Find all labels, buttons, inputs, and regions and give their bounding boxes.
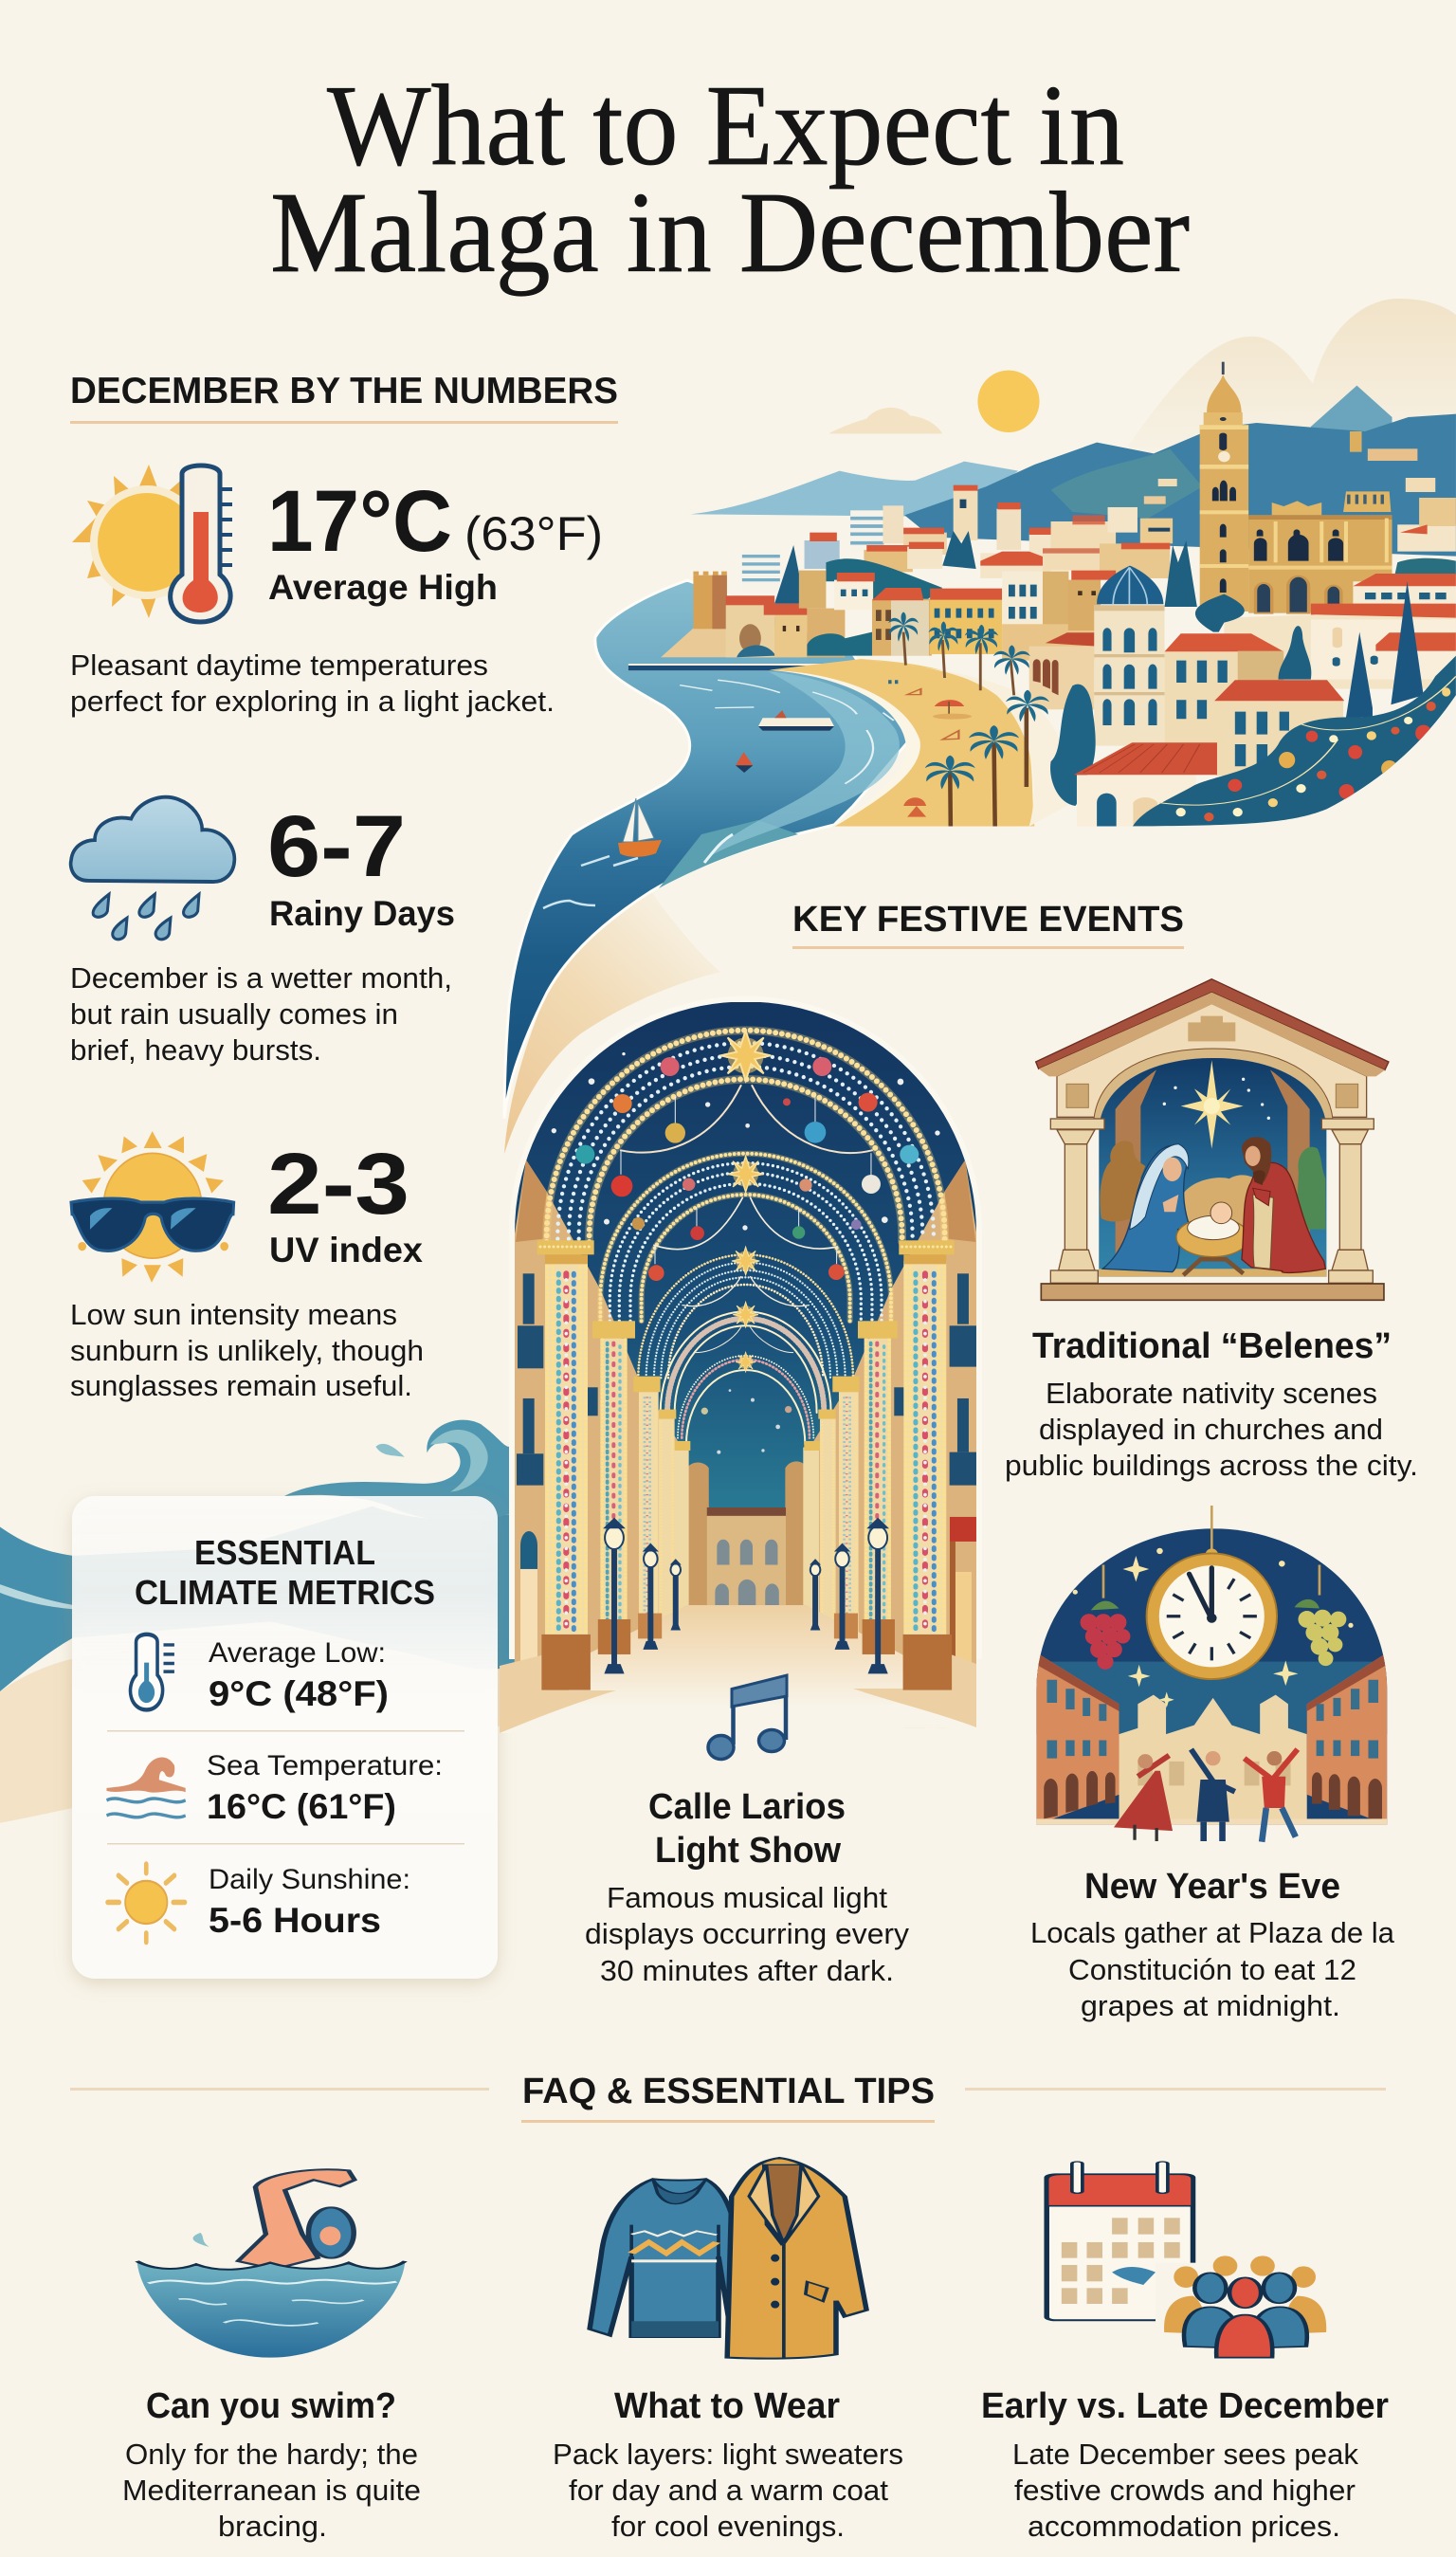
text: New Year's Eve [1030, 1867, 1395, 2022]
tip: what to wear: Pack layers: light sweaters [553, 2438, 903, 2471]
illustration: Malaga city skyline [628, 362, 1456, 836]
far arches [638, 1254, 853, 1444]
background clouds top right [1128, 299, 1456, 474]
stat: UV index: sunglasses remain useful. [70, 1369, 412, 1402]
pillar bases and lamps [541, 1518, 952, 1690]
icon: rain cloud [71, 797, 234, 940]
panel heading: ESSENTIAL [194, 1533, 375, 1572]
tip: what to wear: for day and a warm coat [569, 2474, 888, 2507]
modern blocks and hillside town [742, 485, 1173, 593]
tip: can you swim: Mediterranean is quite [122, 2474, 421, 2507]
metric: sea temperature [207, 1750, 443, 1826]
text: Calle Larios Light Show: 30 minutes after dark. [600, 1954, 894, 1987]
illustration: nativity scene [1036, 979, 1389, 1300]
sailboat [618, 798, 662, 857]
illustration: New Year's Eve plaza [1034, 1506, 1389, 1842]
illustration: sea ribbon [504, 580, 910, 1154]
text: Calle Larios Light Show: Calle Larios [648, 1787, 846, 1827]
text: New Year's Eve: Constitución to eat 12 [1068, 1953, 1356, 1986]
stat: rainy days: 6-7 [267, 798, 406, 895]
first arch [547, 1031, 945, 1242]
tip: early vs late December: festive crowds and higher [1014, 2474, 1356, 2507]
stat: rainy days [70, 797, 455, 1067]
castle and fort [661, 545, 872, 657]
promenade [628, 664, 821, 671]
cathedral [1200, 362, 1392, 613]
stat: average high: Pleasant daytime temperatures [70, 648, 488, 682]
stat: rainy days: Rainy Days [269, 894, 455, 933]
people celebrating [1119, 1749, 1298, 1842]
stat: average high: 17°C [267, 473, 452, 570]
boats [736, 710, 834, 773]
metric: average low: Average Low: [209, 1637, 386, 1669]
text: Calle Larios Light Show: Light Show [655, 1831, 841, 1871]
icon: thermometer [131, 1635, 174, 1709]
hill with festive lights [1132, 656, 1456, 828]
text: Calle Larios Light Show [585, 1787, 910, 1987]
icon: small sun [108, 1864, 185, 1943]
mountains [691, 386, 1456, 557]
metric: daily sunshine: 5-6 Hours [209, 1901, 381, 1940]
right side houses [1224, 498, 1456, 689]
text: Traditional Belenes: Elaborate nativity scenes [1046, 1377, 1377, 1410]
far pillars [592, 1321, 897, 1633]
tip: can you swim: Only for the hardy; the [125, 2438, 418, 2471]
tip: can you swim: Can you swim? [146, 2386, 396, 2426]
decorative wave behind card [0, 1420, 528, 1823]
tip: early vs late December: accommodation prices. [1028, 2510, 1340, 2543]
stat: average high [70, 465, 603, 718]
stat: UV index: sunburn is unlikely, though [70, 1334, 424, 1367]
illustration: Calle Larios light arches [500, 995, 982, 1733]
seafront buildings [834, 571, 1116, 709]
stat: average high: Average High [268, 568, 498, 607]
icon: calendar and crowd [1046, 2162, 1326, 2358]
icon: sun with sunglasses [71, 1131, 234, 1283]
floor side wedges [500, 1654, 976, 1733]
second arch [600, 1154, 891, 1321]
panel heading: CLIMATE METRICS [135, 1573, 435, 1612]
icon: sweater and coat [590, 2158, 866, 2359]
text: Traditional Belenes: displayed in churches and [1039, 1413, 1383, 1446]
stat: rainy days: December is a wetter month, [70, 961, 452, 995]
icon: sun and thermometer [72, 465, 232, 622]
panel heading [135, 1533, 435, 1612]
metric: sea temperature: Sea Temperature: [207, 1750, 443, 1781]
tip: early vs late December: Early vs. Late December [981, 2386, 1389, 2426]
small cloud [828, 408, 942, 433]
metric: average low [209, 1637, 389, 1713]
end of street buildings [687, 1461, 807, 1610]
street floor [500, 1605, 976, 1733]
metric: daily sunshine: Daily Sunshine: [209, 1864, 410, 1895]
tip: what to wear [553, 2158, 903, 2543]
stat: UV index: Low sun intensity means [70, 1298, 397, 1331]
dome tower [1094, 566, 1165, 746]
stat: average high: (63°F) [464, 507, 603, 560]
tip: what to wear: for cool evenings. [611, 2510, 845, 2543]
text: Traditional Belenes: Traditional “Belenes” [1032, 1326, 1392, 1366]
title: What to Expect in [327, 62, 1124, 190]
text: Traditional Belenes: public buildings across the city. [1005, 1449, 1418, 1482]
stat: UV index [70, 1131, 424, 1402]
text: New Year's Eve: Locals gather at Plaza de la [1030, 1916, 1395, 1949]
metric: average low: 9°C (48°F) [209, 1674, 389, 1713]
text: Calle Larios Light Show: Famous musical light [607, 1881, 887, 1914]
metric: sea temperature: 16°C (61°F) [207, 1787, 396, 1826]
heading: FAQ and essential tips: FAQ & ESSENTIAL TIPS [522, 2072, 935, 2111]
stat: rainy days: but rain usually comes in [70, 997, 398, 1031]
tip: early vs late December [981, 2162, 1389, 2543]
title: Malaga in December [270, 169, 1190, 297]
heading: FAQ and essential tips [70, 2072, 1386, 2123]
sun over the city [977, 371, 1040, 432]
stat: UV index: UV index [269, 1231, 423, 1269]
text: New Year's Eve: grapes at midnight. [1081, 1989, 1340, 2022]
palm trees [888, 612, 1049, 827]
panel: essential climate metrics [72, 1496, 498, 1979]
tip: what to wear: What to Wear [614, 2386, 840, 2426]
main pillars [537, 1240, 955, 1728]
icon: music notes [708, 1675, 787, 1760]
tip: can you swim [122, 2169, 421, 2543]
stat: UV index: 2-3 [267, 1136, 410, 1233]
text: Traditional Belenes [1005, 1326, 1418, 1482]
tip: can you swim: bracing. [218, 2510, 327, 2543]
central houses [1050, 581, 1424, 806]
icon: sea wave [106, 1757, 186, 1817]
building walls and arches [515, 1031, 977, 1728]
stat: average high: perfect for exploring in a light jacket. [70, 685, 555, 718]
red roof house [1074, 742, 1217, 827]
heading: December by the numbers: DECEMBER BY THE NUMBERS [70, 371, 618, 411]
metric: daily sunshine [209, 1864, 410, 1940]
tip: early vs late December: Late December sees peak [1012, 2438, 1359, 2471]
sea foam [680, 680, 894, 784]
trees behind the centre [826, 531, 1245, 632]
beach details [888, 680, 972, 817]
beach [769, 659, 1034, 836]
heading: key festive events: KEY FESTIVE EVENTS [792, 900, 1184, 940]
text: Calle Larios Light Show: displays occurring every [585, 1917, 910, 1950]
stat: rainy days: brief, heavy bursts. [70, 1033, 321, 1067]
icon: swimmer [136, 2169, 405, 2358]
title [270, 62, 1190, 297]
text: New Year's Eve: New Year's Eve [1084, 1867, 1340, 1907]
